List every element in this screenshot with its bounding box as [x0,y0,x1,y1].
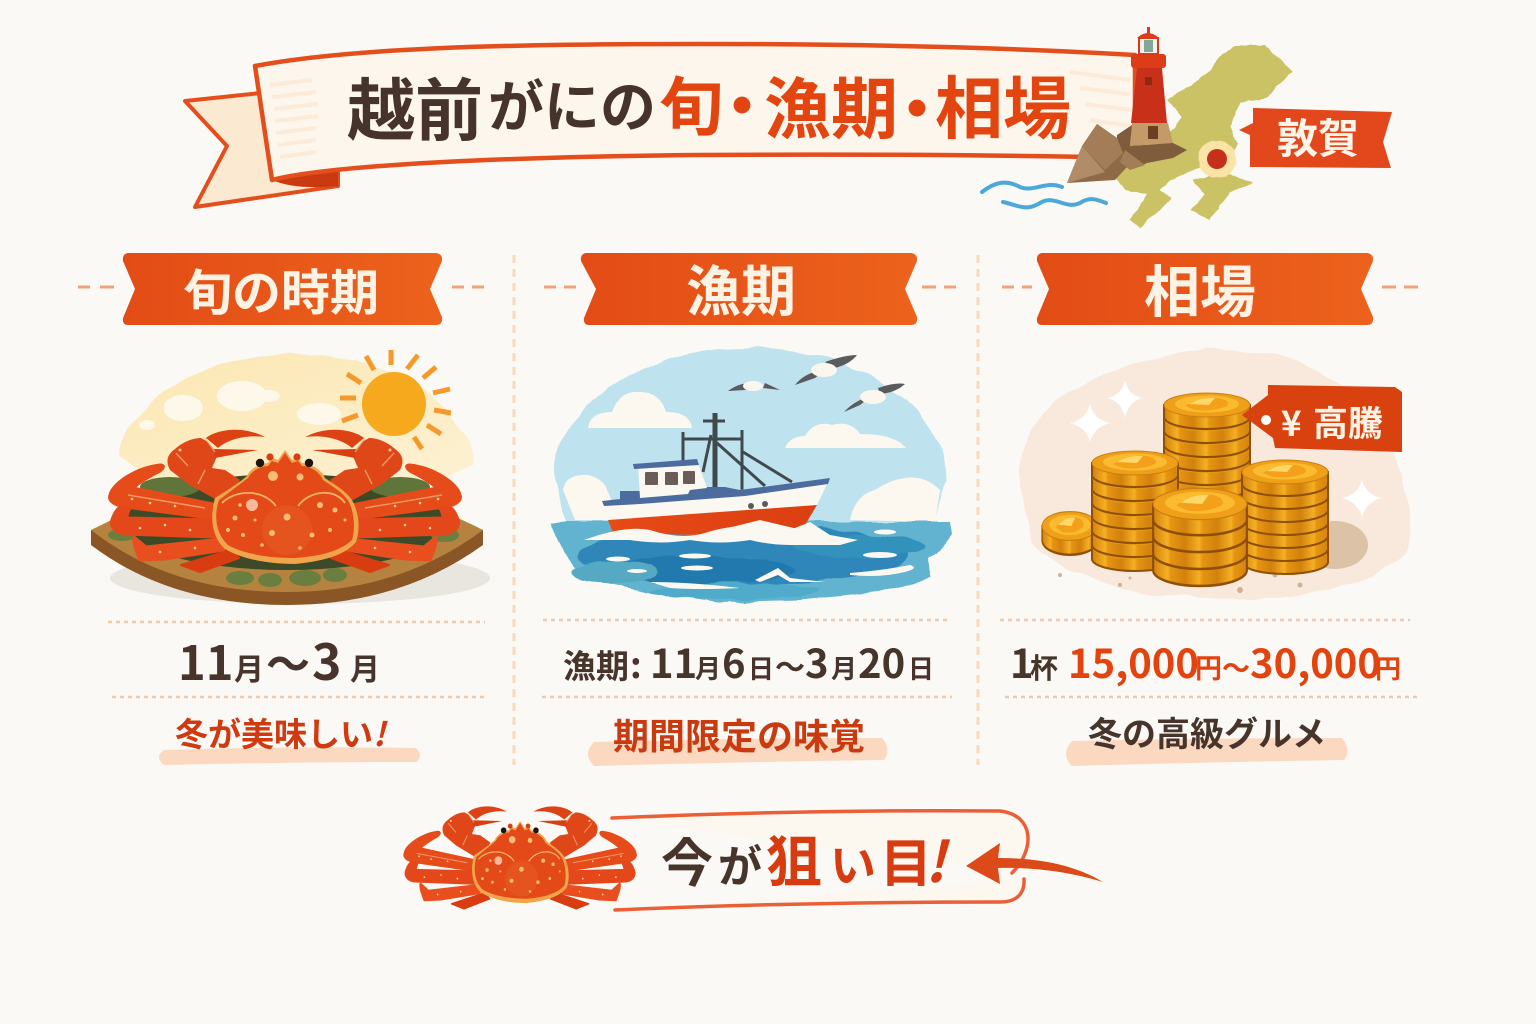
sea [550,522,952,602]
left stack [1092,451,1178,571]
caption: 冬が美味しい! [175,708,388,756]
gulls [728,355,905,412]
period text: 〜 [775,643,805,687]
plate [91,480,483,605]
waves [982,183,1106,207]
heading banner: 相場 [1144,248,1256,329]
price tag: 高騰 [1313,396,1383,447]
price text: 円 [1195,647,1222,686]
ribbon fold [272,166,338,187]
bottom call to action [404,806,1103,910]
greens [108,474,459,587]
slogan: 狙 [766,818,822,899]
price text: 杯 [1030,647,1058,687]
arrow [966,843,1103,884]
boat cabin [633,459,707,498]
period text [542,620,952,697]
title text: ・ [709,54,775,150]
price text: 1 [1010,632,1034,690]
title text: 旬 [659,57,723,149]
title ribbon [185,44,1135,207]
title text: 越前 [347,56,483,155]
front stack [1153,488,1247,586]
vertical dividers [514,255,978,765]
map of Tsuruga with lighthouse [982,27,1392,228]
period text: 6 [722,632,746,690]
caption [159,708,420,765]
sky [553,347,945,522]
foam [584,522,914,589]
slogan: ! [925,818,951,899]
title text: ・ [884,57,950,153]
period text: 20 [858,632,905,690]
title text: 漁期 [764,56,898,153]
single coin [1042,512,1098,555]
ribbon tail [185,92,338,207]
price tag [1242,385,1402,452]
period text: 漁期 [563,640,629,688]
boat mast and rigging [683,413,792,490]
period text: 月 [831,649,857,686]
rocks [1067,124,1187,183]
slogan: 今 [661,822,713,897]
price text: 30,000 [1250,632,1381,690]
place tag: 敦賀 [1277,105,1359,165]
map land [1110,45,1293,228]
heading banner [78,253,484,325]
clouds [563,392,940,522]
period text: 月 [695,649,721,686]
caption: 冬の高級グルメ [1088,707,1326,756]
price text: 円 [1375,649,1401,686]
crab [110,430,460,572]
panel: 旬の時期 [78,253,490,765]
boat hull [602,478,830,535]
price tag: ¥ [1281,396,1302,447]
sand shadow [1058,521,1368,593]
period text: 3 [805,632,829,690]
plate shadow [110,552,490,604]
title text: 相場 [935,54,1071,153]
slogan: が [718,831,762,895]
clouds [139,381,341,430]
place tag [1239,105,1392,168]
back stack [1164,393,1250,513]
sun [340,350,451,449]
period text: 〜 [266,629,310,693]
heading banner [1002,248,1418,329]
slogan: 目 [880,822,932,897]
price text: 15,000 [1068,632,1199,690]
illustration: coin stacks [1020,350,1412,599]
period text: 月 [350,645,380,689]
right stack [1242,460,1328,574]
price text [1000,620,1418,697]
slogan: い [830,830,876,896]
ribbon body [255,44,1135,180]
heading banner [544,247,956,327]
small crab [404,806,636,909]
heading banner: 旬の時期 [183,254,379,325]
period text: 日 [748,649,774,686]
sky blob [120,353,473,480]
panel: 相場 [1000,248,1418,766]
price text: 〜 [1222,647,1250,687]
period text: : [630,637,642,689]
period text: 11 [650,632,697,690]
Tsuruga marker [1198,140,1236,178]
caption: 期間限定の味覚 [613,708,865,760]
background wash [1020,350,1412,599]
heading banner: 漁期 [686,247,796,327]
period text [108,622,485,697]
sparkles [1070,380,1382,517]
lighthouse [1130,27,1173,146]
title text: がにの [488,63,656,144]
period text: 3 [312,623,342,695]
illustration: crab on plate with sun [91,350,490,605]
callout box [612,811,1028,910]
panel: 漁期 [542,247,956,766]
period text: 日 [908,649,934,686]
period text: 11 [178,625,233,694]
period text: 月 [234,645,264,689]
illustration: boat at sea [550,347,952,602]
